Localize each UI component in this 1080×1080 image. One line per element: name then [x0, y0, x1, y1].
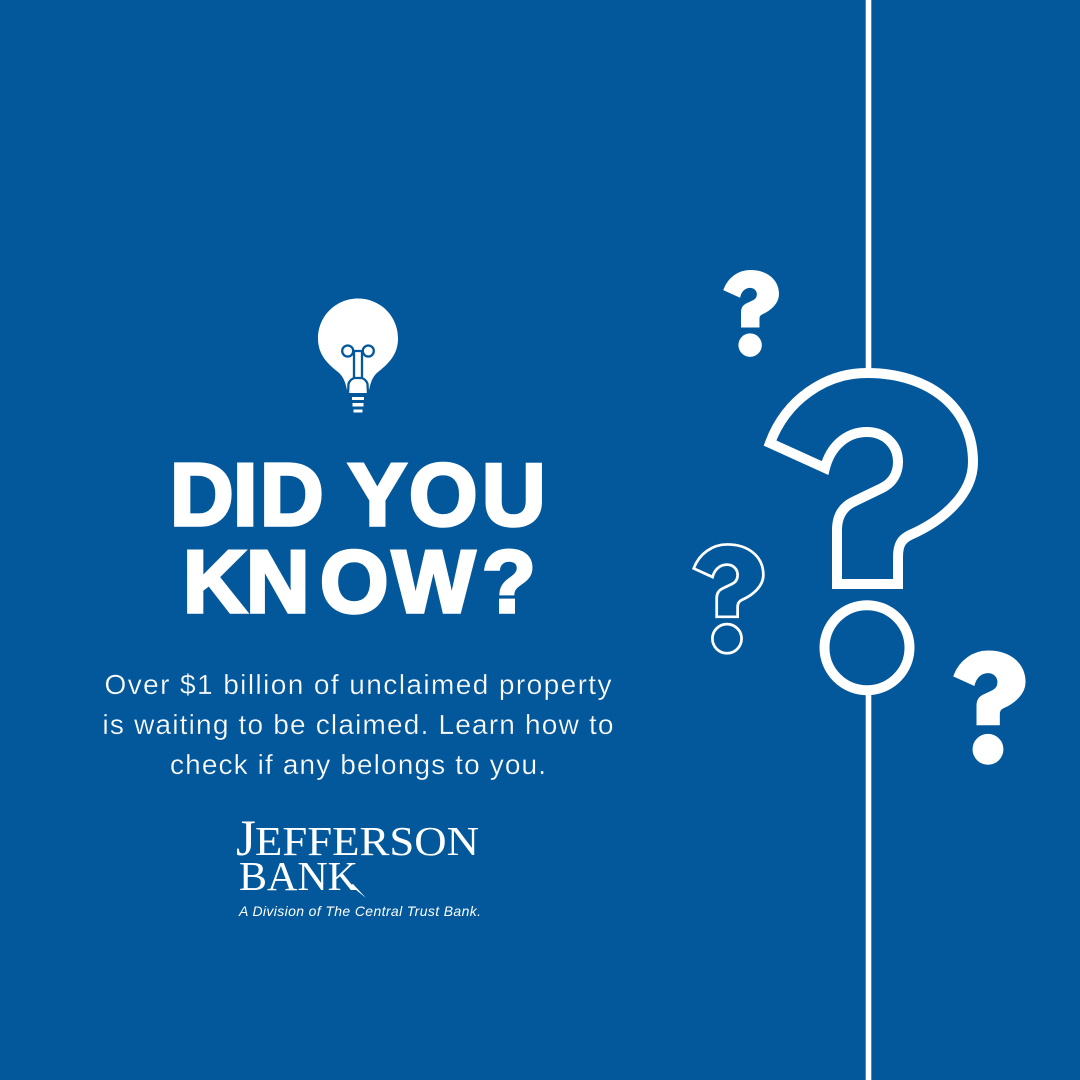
body text: Over $1 billion of unclaimed property: [104, 669, 612, 700]
vertical line bottom: [866, 692, 871, 1080]
title: KNOW?: [183, 532, 536, 631]
title: [170, 445, 546, 631]
logo: Jefferson Bank: A Division of The Central Trust Bank.: [238, 903, 481, 919]
logo: Jefferson Bank: EFFERSON: [255, 818, 479, 864]
title: DID YOU: [170, 445, 546, 544]
icon: light bulb: [318, 298, 398, 412]
body text: [102, 669, 614, 780]
icon: large outlined question mark: [770, 373, 973, 690]
icon: solid question mark right: [955, 652, 1024, 764]
logo: Jefferson Bank: [236, 811, 481, 919]
icon: solid question mark top: [725, 271, 778, 356]
icon: small outlined question mark: [694, 544, 763, 653]
body text: is waiting to be claimed. Learn how to: [102, 709, 614, 740]
logo: Jefferson Bank: J: [236, 811, 256, 867]
body text: check if any belongs to you.: [170, 749, 546, 780]
logo: Jefferson Bank: BANK: [239, 853, 358, 899]
vertical line top: [866, 0, 871, 372]
